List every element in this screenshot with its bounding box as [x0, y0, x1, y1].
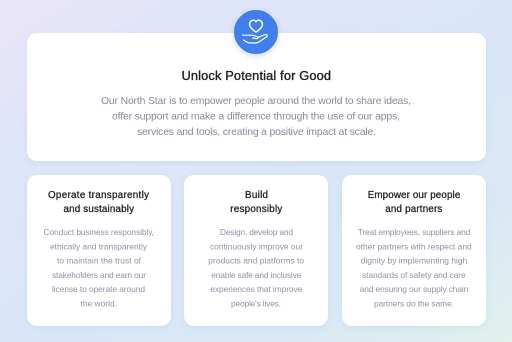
- heading: Operate transparently and sustainably: [48, 190, 149, 215]
- heading: Operate transparently and sustainably: and sustainably: [64, 204, 134, 215]
- text block: Build description: [208, 227, 304, 308]
- text block: Operate description: license to operate around: [52, 284, 145, 294]
- text block: North Star statement: offer support and make a difference through the use of our apps,: [112, 112, 400, 122]
- text block: Operate description: ethically and transparently: [50, 241, 148, 251]
- heading: Operate transparently and sustainably: Operate transparently: [48, 190, 149, 201]
- text block: Build description: continuously improve our: [210, 241, 303, 251]
- heading: Empower our people and partners: [368, 190, 461, 215]
- text block: Build description: products and platforms to: [208, 256, 304, 266]
- text block: Build description: enable safe and inclusive: [211, 270, 302, 280]
- panel: Operate transparently and sustainably: [27, 175, 171, 326]
- panel: Unlock Potential for Good: [27, 33, 486, 161]
- text block: Build description: experiences that improve: [210, 284, 303, 294]
- text block: Build description: people's lives.: [231, 298, 281, 308]
- heading: Empower our people and partners: Empower our people: [368, 190, 461, 201]
- text block: Empower description: [356, 227, 472, 308]
- heading: Build responsibly: [230, 190, 282, 215]
- text block: Operate description: the world.: [80, 298, 117, 308]
- heading: Unlock Potential for Good: Unlock Potential for Good: [182, 68, 331, 83]
- text block: North Star statement: [101, 96, 411, 138]
- text block: Empower description: and ensuring our supply chain: [360, 284, 469, 294]
- panel: Empower our people and partners: [342, 175, 486, 326]
- icon: hand holding heart badge: [234, 10, 278, 54]
- text block: Empower description: standards of safety and care: [362, 270, 466, 280]
- text block: Operate description: to maintain the trust of: [57, 256, 142, 266]
- text block: Empower description: dignity by implementing high: [361, 256, 468, 266]
- text block: North Star statement: Our North Star is to empower people around the world to share ideas,: [101, 96, 411, 107]
- text block: Operate description: Conduct business responsibly,: [44, 227, 154, 237]
- text block: Operate description: [44, 227, 154, 308]
- text block: Build description: Design, develop and: [220, 227, 293, 237]
- text block: Empower description: other partners with respect and: [356, 241, 472, 251]
- heading: Empower our people and partners: and partners: [385, 204, 442, 215]
- heading: Build responsibly: Build: [245, 190, 268, 201]
- text block: North Star statement: services and tools, creating a positive impact at scale.: [137, 127, 376, 138]
- text block: Empower description: Treat employees, suppliers and: [358, 227, 471, 237]
- panel: Build responsibly: [184, 175, 328, 326]
- text block: Empower description: partners do the same.: [374, 298, 454, 308]
- text block: Operate description: stakeholders and earn our: [52, 270, 146, 280]
- heading: Build responsibly: responsibly: [230, 204, 282, 215]
